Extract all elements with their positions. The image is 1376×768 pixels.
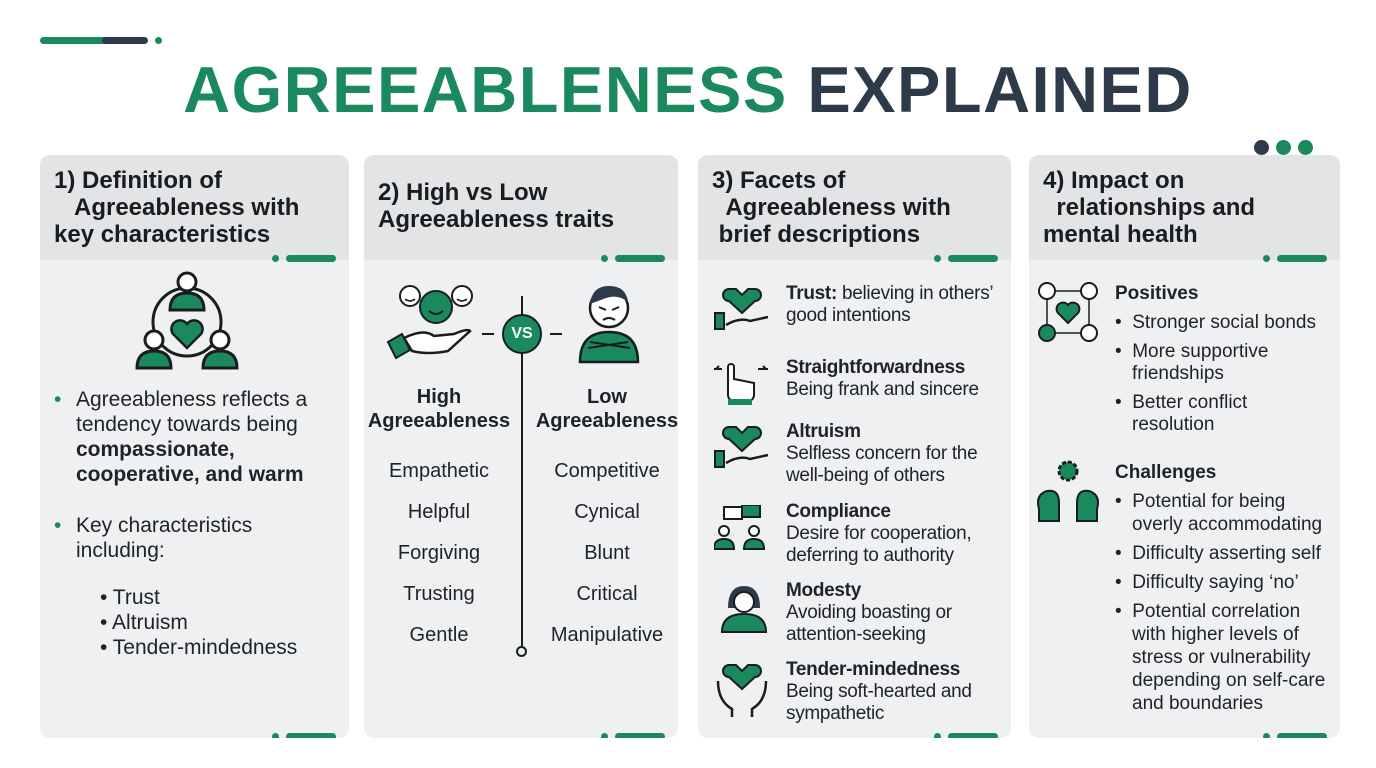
text: definition bullets: Key characteristics including: xyxy=(76,514,252,562)
facet: trust: Trust: believing in others’ good intentions xyxy=(786,283,993,326)
text: positives: • More supportive friendships xyxy=(1115,341,1268,384)
list: facets xyxy=(714,283,993,724)
heading: facets: 3) Facets of xyxy=(712,167,845,194)
facet: tender-mindedness: Tender-mindedness xyxy=(786,659,960,680)
heading: facets: Agreeableness with xyxy=(725,194,951,221)
facet: trust xyxy=(714,283,993,330)
text: challenges: Challenges xyxy=(1115,462,1216,483)
heading: impact: mental health xyxy=(1043,221,1198,248)
heading: high vs low: Agreeableness traits xyxy=(378,206,614,233)
text: low column xyxy=(536,386,678,646)
text: definition bullets: Agreeableness reflects a tendency towards being compassionate, cooperative, and warm xyxy=(76,388,307,486)
icon: group with heart xyxy=(136,272,238,370)
text: positives: • Better conflict resolution xyxy=(1115,392,1247,435)
text: high column: Empathetic xyxy=(389,460,489,482)
heading: impact: 4) Impact on xyxy=(1043,167,1184,194)
text: challenges: • Difficulty saying ‘no’ xyxy=(1115,572,1299,593)
facet: modesty: Avoiding boasting or attention-seeking xyxy=(786,602,952,645)
text: definition bullets: • xyxy=(54,388,61,411)
facet: modesty: Modesty xyxy=(786,580,861,601)
text: low column: Critical xyxy=(576,583,638,605)
text: positives: • Stronger social bonds xyxy=(1115,312,1316,333)
text: high column: Trusting xyxy=(403,583,475,605)
heading: definition xyxy=(40,155,349,260)
text: definition bullets: • Trust xyxy=(100,586,160,609)
facet: modesty xyxy=(721,580,952,645)
text: high column xyxy=(368,386,510,646)
text: low column: Low xyxy=(587,386,627,408)
facet: straightforwardness: Straightforwardness xyxy=(786,357,965,378)
icon: happy faces on hand xyxy=(386,285,473,360)
heading: impact: relationships and xyxy=(1056,194,1255,221)
text: high column: Gentle xyxy=(410,624,468,646)
icon: vs divider xyxy=(482,296,562,657)
text: challenges xyxy=(1115,462,1325,714)
text: challenges: • Difficulty asserting self xyxy=(1115,543,1321,564)
facet: altruism xyxy=(714,421,977,486)
facet: tender-mindedness: Being soft-hearted and sympathetic xyxy=(786,681,972,724)
icon: vs divider: VS xyxy=(511,325,533,342)
text: challenges: • Potential for being overly accommodating xyxy=(1115,491,1322,535)
panel: impact xyxy=(1029,155,1340,738)
facet: compliance: Compliance xyxy=(786,501,891,522)
heading: definition: 1) Definition of xyxy=(54,167,222,194)
text: high column: Helpful xyxy=(408,501,470,523)
text: definition bullets: • xyxy=(54,514,61,537)
text: low column: Competitive xyxy=(554,460,660,482)
heading: high vs low xyxy=(364,155,678,260)
text: high column: Agreeableness xyxy=(368,410,510,432)
panel: high vs low xyxy=(364,155,678,738)
panel: definition xyxy=(40,155,349,738)
facet: straightforwardness xyxy=(714,357,979,405)
text: low column: Manipulative xyxy=(551,624,663,646)
facet: altruism: Altruism xyxy=(786,421,861,442)
facet: tender-mindedness xyxy=(716,659,972,724)
text: definition bullets xyxy=(54,388,308,659)
panel: facets xyxy=(698,155,1011,738)
text: challenges: • Potential correlation with higher levels of stress or vulnerability depending on self-care and boundaries xyxy=(1115,601,1325,714)
facet: compliance: Desire for cooperation, deferring to authority xyxy=(786,523,971,566)
text: high column: High xyxy=(417,386,461,408)
text: definition bullets: • Tender-mindedness xyxy=(100,636,297,659)
facet: straightforwardness: Being frank and sincere xyxy=(786,379,979,400)
heading: impact xyxy=(1029,155,1340,260)
top decoration xyxy=(40,37,162,44)
icon: heads with gear xyxy=(1037,460,1099,522)
text: positives xyxy=(1115,283,1316,435)
text: definition bullets: • Altruism xyxy=(100,611,188,634)
text: low column: Agreeableness xyxy=(536,410,678,432)
facet: altruism: Selfless concern for the well-being of others xyxy=(786,443,977,486)
text: positives: Positives xyxy=(1115,283,1198,304)
text: low column: Cynical xyxy=(574,501,640,523)
title: AGREEABLENESS EXPLAINED xyxy=(183,53,1193,126)
icon: connected people heart xyxy=(1038,282,1098,342)
icon: grumpy person xyxy=(578,286,640,364)
top-right dots xyxy=(1254,140,1313,155)
text: high column: Forgiving xyxy=(398,542,480,564)
facet: compliance xyxy=(714,501,971,566)
text: low column: Blunt xyxy=(584,542,630,564)
heading: high vs low: 2) High vs Low xyxy=(378,179,547,206)
heading: facets xyxy=(698,155,1011,260)
heading: definition: key characteristics xyxy=(54,221,270,248)
heading: definition: Agreeableness with xyxy=(74,194,299,221)
heading: facets: brief descriptions xyxy=(719,221,920,248)
